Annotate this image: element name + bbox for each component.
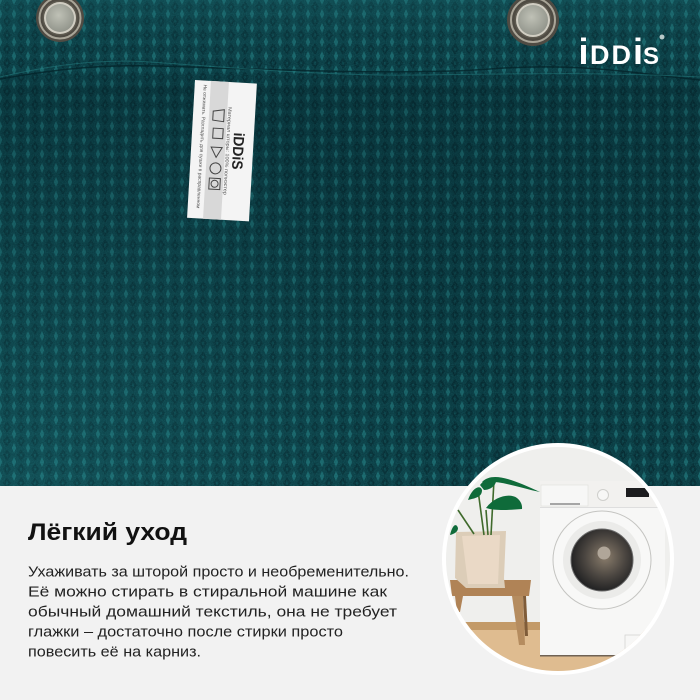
baseboard xyxy=(466,622,540,630)
plant xyxy=(450,477,540,535)
circular washing machine photo xyxy=(440,440,680,680)
canvas bag xyxy=(455,531,506,588)
label grey band xyxy=(203,81,229,220)
lower hatch xyxy=(624,634,640,649)
title: Лёгкий уход xyxy=(28,519,187,546)
body text: повесить её на карниз. xyxy=(28,644,201,660)
body text: Ухаживать за шторой просто и необременительно. xyxy=(28,564,409,580)
label care icons xyxy=(209,109,224,190)
body text: обычный домашний текстиль, она не требует xyxy=(28,604,397,620)
label brand name: iDDiS xyxy=(228,132,247,170)
body text: глажки – достаточно после стирки просто xyxy=(28,624,343,640)
wall xyxy=(446,447,670,622)
body text xyxy=(28,564,409,660)
display xyxy=(626,488,649,497)
sewn care label xyxy=(187,80,257,221)
wooden bench xyxy=(450,580,531,645)
right grommet xyxy=(507,0,559,46)
detergent drawer xyxy=(541,485,588,506)
door xyxy=(553,511,651,609)
iddis logo: iDDiS xyxy=(578,31,659,72)
label material text: Материал шторы: 100% полиэстер xyxy=(221,107,232,195)
logo registered mark xyxy=(660,34,664,40)
body text: Её можно стирать в стиральной машине как xyxy=(28,584,387,600)
fabric background xyxy=(0,0,700,486)
left grommet xyxy=(36,0,84,42)
label care text: Не отжимать. Разгладить для сушки в расправленном xyxy=(195,84,208,209)
bottom text panel xyxy=(0,486,700,700)
curtain top hem seam xyxy=(0,61,700,80)
dial xyxy=(598,490,608,500)
washing machine xyxy=(540,481,665,656)
wooden floor xyxy=(472,630,644,671)
